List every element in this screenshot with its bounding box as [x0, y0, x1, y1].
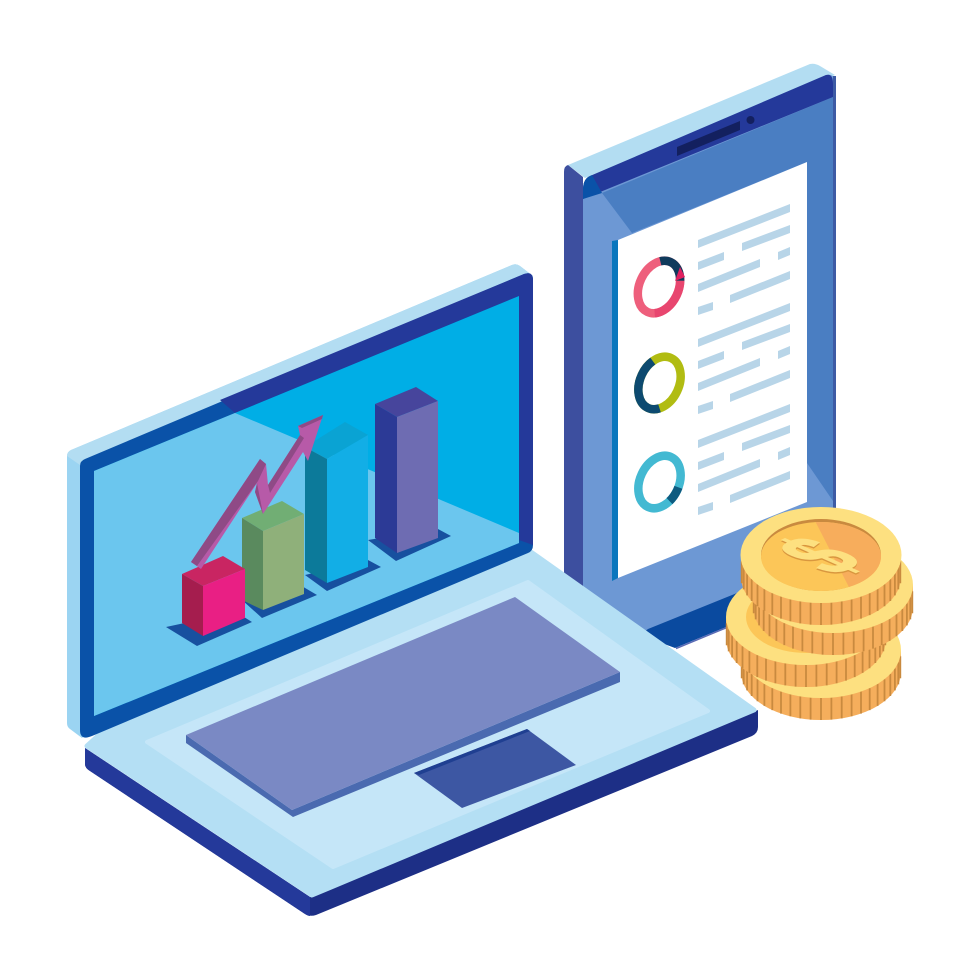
coin 1 top	[740, 507, 902, 625]
tablet screen document	[612, 162, 807, 581]
trend arrow	[191, 415, 323, 569]
text lines group 1	[698, 204, 790, 315]
teal bar	[305, 422, 368, 583]
text lines group 2	[698, 303, 790, 414]
laptop base side	[85, 710, 758, 916]
dollar sign: $	[755, 526, 885, 585]
laptop lid back edge	[67, 264, 533, 738]
trackpad	[414, 729, 576, 808]
tablet face shading	[602, 97, 833, 501]
base inner panel	[147, 582, 708, 867]
laptop	[67, 264, 758, 916]
ring chart 3	[630, 449, 689, 515]
coin 2	[753, 537, 913, 655]
coin 3	[726, 569, 886, 687]
tablet camera	[746, 116, 754, 124]
ring chart 1	[630, 254, 688, 320]
text lines group 3	[698, 404, 790, 515]
bar chart	[166, 387, 451, 646]
laptop screen	[94, 296, 519, 716]
green bar	[242, 501, 304, 610]
purple bar	[375, 387, 438, 553]
red bar	[182, 556, 245, 636]
tablet	[564, 64, 836, 648]
tablet speaker	[677, 121, 740, 156]
coin 4	[741, 602, 901, 720]
keyboard	[186, 597, 620, 817]
tablet top bezel	[583, 75, 833, 199]
tablet bottom edge	[640, 553, 836, 648]
laptop base top	[87, 550, 754, 895]
ring chart 2	[630, 350, 689, 416]
coin stack	[726, 507, 913, 720]
tablet front face	[583, 75, 836, 645]
dollar sign: $	[755, 528, 885, 587]
tablet left side edge	[564, 165, 583, 600]
bar shadows	[166, 529, 451, 646]
tablet top edge	[568, 64, 835, 178]
coin face	[761, 522, 881, 591]
laptop screen bezel	[80, 273, 533, 738]
illustration	[67, 64, 914, 916]
